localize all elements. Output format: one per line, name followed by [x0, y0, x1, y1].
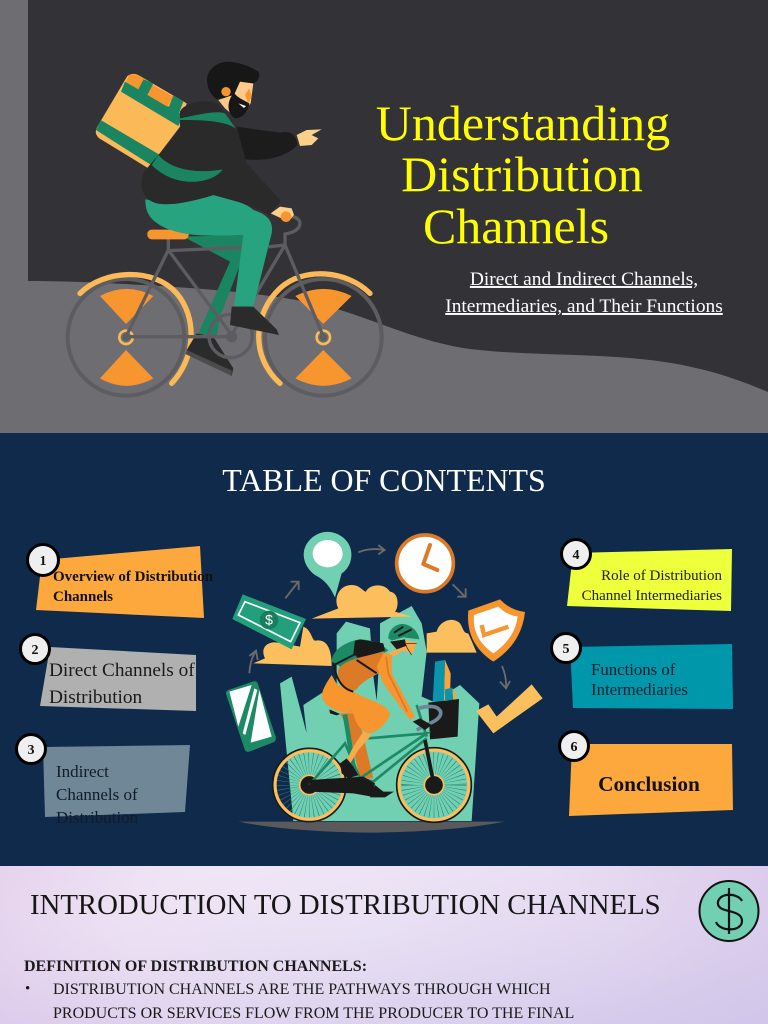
ground shadow [238, 822, 505, 833]
icon: shield [468, 599, 525, 662]
toc item 5: Functions of [591, 660, 676, 679]
icon: map pin [304, 532, 351, 597]
back shoe [340, 758, 358, 778]
books [433, 660, 445, 702]
saddle [329, 709, 340, 715]
heading: INTRODUCTION TO DISTRIBUTION CHANNELS [30, 889, 661, 921]
rear wheel [68, 279, 184, 396]
lower shoe sole [185, 350, 232, 376]
central illustration [226, 532, 543, 833]
icon: dollar coin [700, 881, 758, 941]
mudguards [80, 274, 370, 383]
icon: clock [397, 535, 453, 592]
panel: introduction [0, 866, 768, 1024]
illustration: delivery cyclist [68, 62, 382, 396]
bicycle frame [124, 217, 325, 358]
helmet [388, 624, 419, 641]
toc item 2: 2 [32, 643, 38, 658]
toc item 1: Channels [53, 589, 113, 605]
toc item 5 [552, 634, 733, 709]
panel: table of contents [0, 433, 768, 866]
text block: definition: PRODUCTS OR SERVICES FLOW FROM THE PRODUCER TO THE FINAL [53, 1005, 574, 1022]
toc item 4 [562, 540, 732, 611]
toc item 4: Channel Intermediaries [582, 588, 722, 604]
panel: hero [0, 0, 768, 433]
front fork [425, 740, 434, 785]
toc item 1 [28, 544, 214, 618]
toc item 6: Conclusion [598, 772, 700, 796]
seat tube shadow [343, 714, 357, 777]
hero dark backdrop [28, 0, 768, 392]
glove [413, 718, 432, 730]
near lower leg [345, 732, 372, 767]
toc item 2 [20, 634, 196, 711]
torso [338, 652, 384, 690]
toc item 4: Role of Distribution [601, 568, 722, 584]
far leg [340, 713, 373, 778]
hips and thigh [322, 675, 390, 733]
text block: definition: DISTRIBUTION CHANNELS ARE THE PATHWAYS THROUGH WHICH [53, 981, 551, 998]
basket [428, 699, 459, 739]
straps [334, 653, 377, 692]
gap behind torso [373, 673, 378, 701]
toc item 3: Indirect [56, 762, 109, 781]
subtitle: Direct and Indirect Channels, [470, 269, 698, 290]
upper shoe [230, 307, 279, 335]
lower shoe [187, 333, 233, 376]
icon: check mark [476, 684, 543, 733]
bicycle frame [309, 705, 427, 785]
hair [390, 639, 406, 649]
clouds [253, 585, 477, 666]
text block: definition: • [25, 981, 30, 997]
toc item 3: 3 [28, 743, 34, 758]
text block: definition [24, 958, 574, 1022]
icon: banknote: $ [265, 612, 273, 628]
front wheel [397, 748, 471, 822]
arrows [249, 545, 510, 688]
toc item 3 [16, 734, 190, 827]
neck and face [388, 640, 417, 657]
backpack [332, 639, 388, 667]
text block: definition: DEFINITION OF DISTRIBUTION CHANNELS: [24, 958, 367, 975]
near leg [145, 195, 272, 307]
toc item 1: 1 [40, 554, 46, 569]
title: Understanding [376, 95, 670, 151]
subtitle [445, 269, 723, 317]
front wheel [265, 279, 382, 396]
backpack [96, 74, 187, 168]
title: Distribution [401, 146, 643, 202]
heading: TABLE OF CONTENTS [222, 463, 546, 498]
title: Channels [423, 198, 609, 254]
toc item 6 [560, 732, 733, 816]
chain [309, 777, 375, 797]
near hand and grip [271, 207, 294, 222]
rear wheel [273, 748, 346, 822]
toc item 3: Distribution [56, 808, 139, 827]
toc item 1: Overview of Distribution [53, 569, 214, 585]
far arm [237, 127, 297, 160]
straps [152, 112, 237, 182]
helmet vents [394, 627, 412, 636]
handlebar [417, 706, 441, 730]
arm shade [386, 657, 407, 712]
city silhouette [280, 606, 479, 821]
toc item 5: Intermediaries [591, 680, 688, 699]
toc item 6: 6 [570, 740, 578, 755]
pointing hand [297, 129, 322, 146]
pack top [353, 639, 385, 658]
saddle [147, 230, 189, 239]
title [376, 95, 670, 254]
toc item 2: Direct Channels of [49, 660, 195, 681]
arm [377, 653, 415, 720]
icon: banknote [232, 594, 306, 649]
toc item 5: 5 [562, 642, 570, 657]
icon: smartphone [226, 681, 276, 752]
toc item 2: Distribution [49, 687, 143, 708]
toc item 4: 4 [572, 548, 580, 563]
glasses [405, 643, 417, 655]
jacket [141, 101, 281, 215]
subtitle: Intermediaries, and Their Functions [445, 296, 723, 317]
far leg [183, 235, 243, 337]
rider and bike frame [309, 624, 441, 797]
toc item 3: Channels of [56, 785, 138, 804]
head [207, 62, 259, 118]
front shoe [370, 785, 394, 797]
